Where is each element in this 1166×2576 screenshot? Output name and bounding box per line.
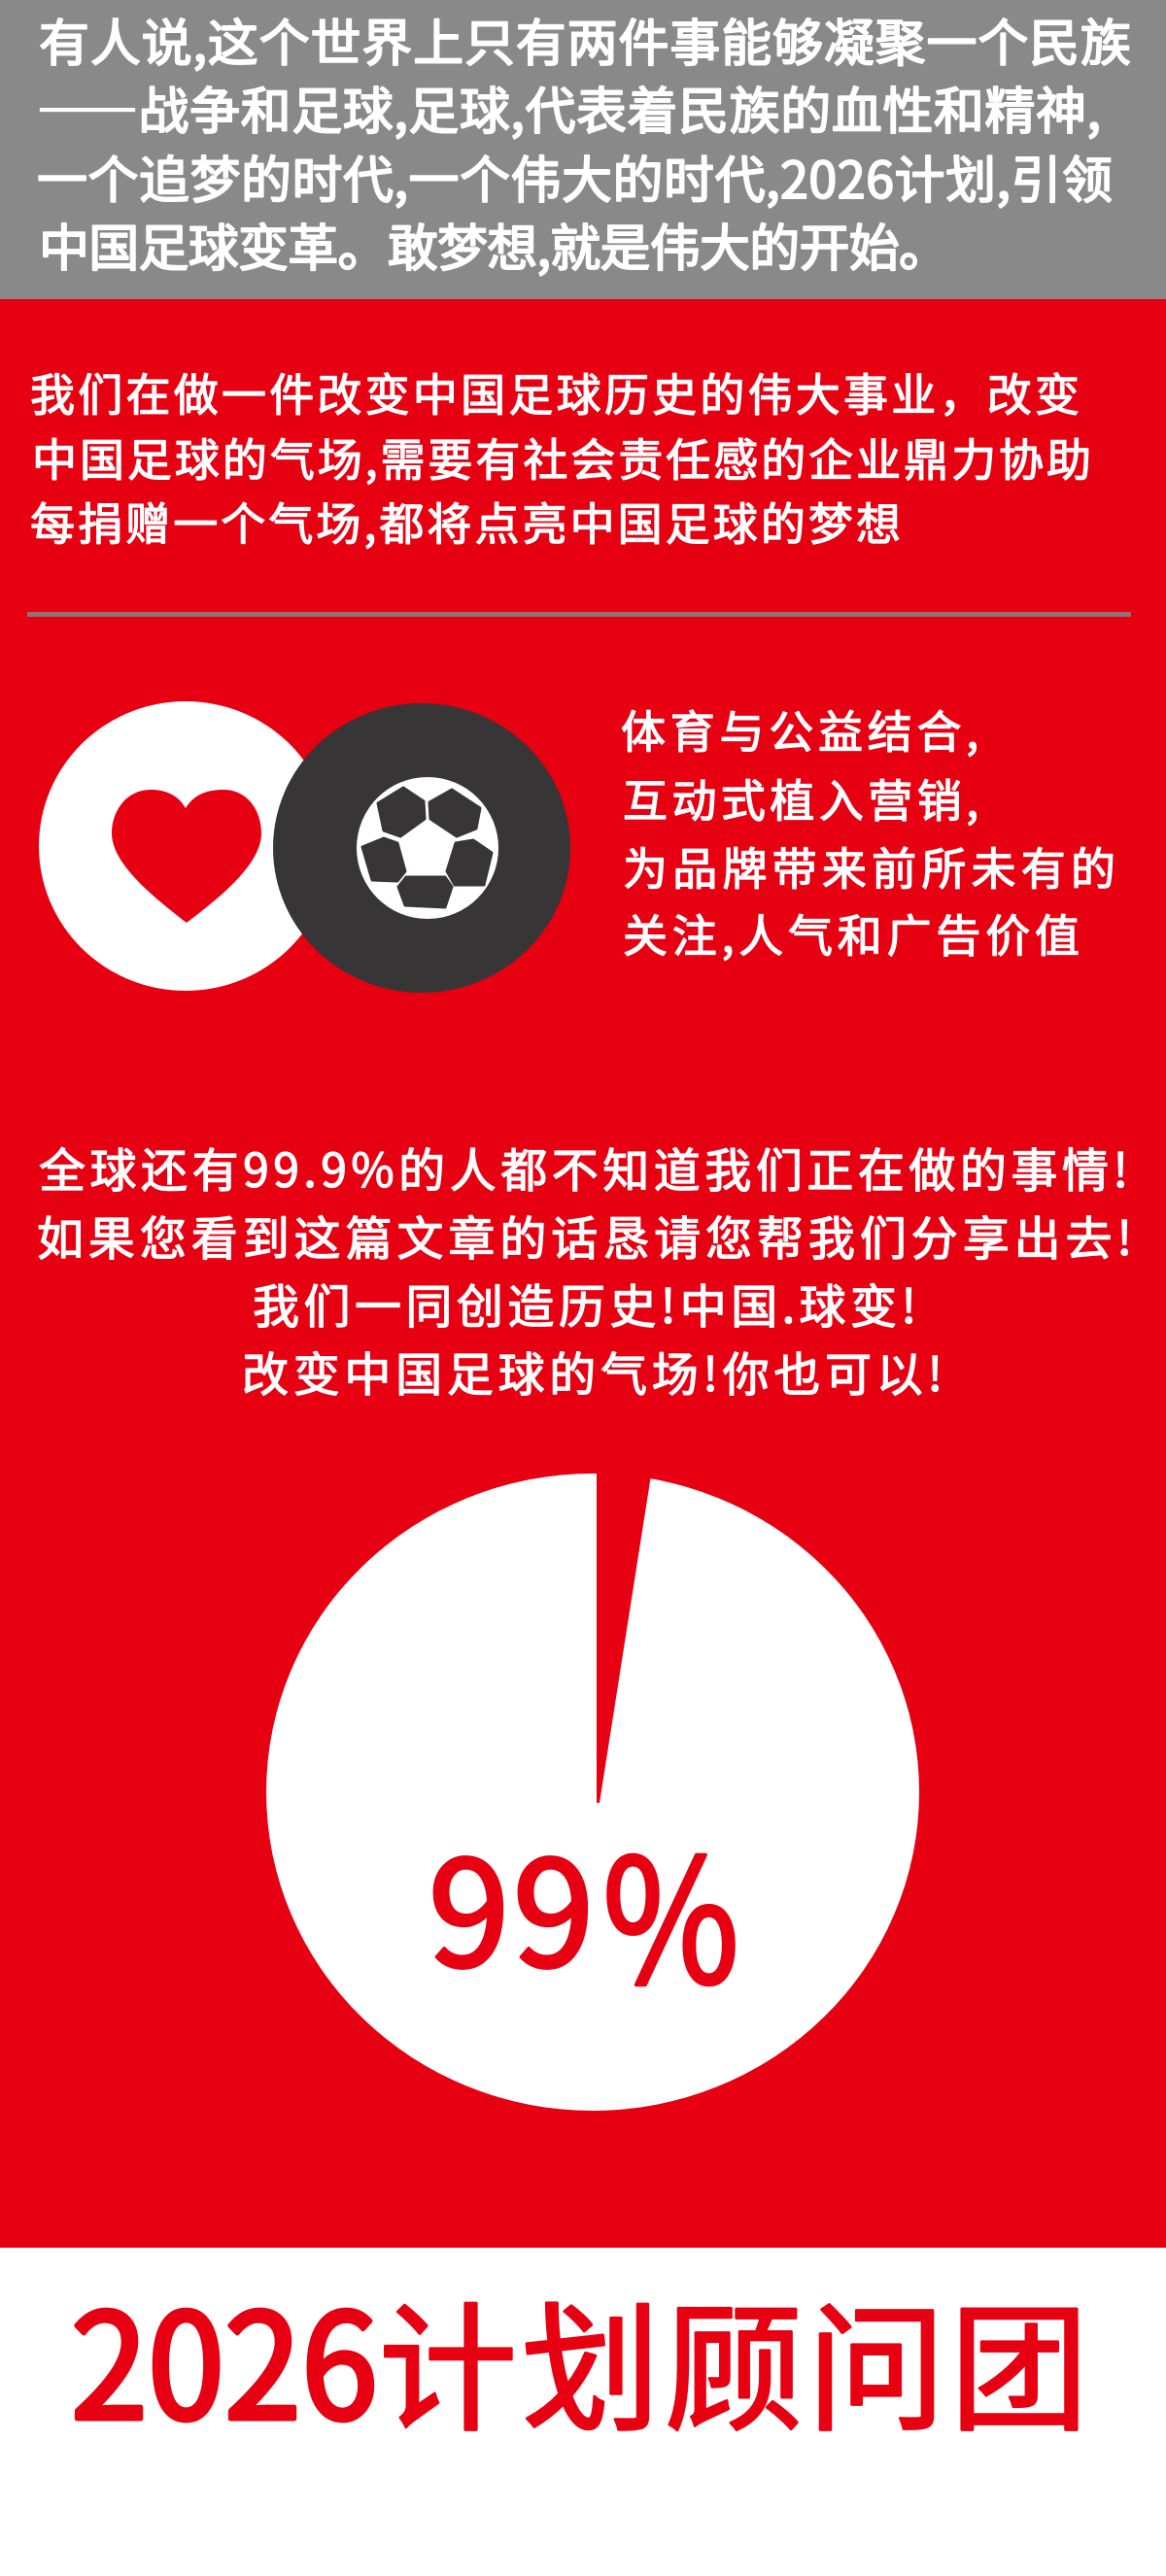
text block: intro: 一个追梦的时代,一个伟大的时代,2026计划,引领 (37, 140, 1113, 213)
heading: advisory group: 计划顾问团 (379, 2258, 1088, 2458)
icon: heart in white circle (39, 701, 332, 991)
panel: red main background (0, 299, 1166, 2248)
text block: call to share: 我们一同创造历史!中国.球变! (253, 1269, 916, 1337)
text block: sports and charity (621, 697, 1115, 966)
text block: call to share: 全球还有99.9%的人都不知道我们正在做的事情! (39, 1133, 1128, 1201)
text block: sports and charity: 关注,人气和广告价值 (623, 901, 1080, 966)
icon: soccer ball in dark circle (273, 703, 570, 993)
text block: sports and charity: 互动式植入营销, (623, 766, 978, 830)
pie value label: 99 (429, 1798, 594, 2009)
text block: call to share: 改变中国足球的气场!你也可以! (242, 1337, 943, 1405)
text block: intro: 有人说,这个世界上只有两件事能够凝聚一个民族 (39, 3, 1131, 76)
text block: call to share (37, 1133, 1132, 1405)
text block: mission statement (30, 360, 1091, 554)
heading: advisory group: 2026 (71, 2251, 378, 2461)
pie value label (429, 1784, 739, 2032)
text block: call to share: 如果您看到这篇文章的话恳请您帮我们分享出去! (37, 1201, 1132, 1269)
text block: intro: ——战争和足球,足球,代表着民族的血性和精神, (37, 71, 1101, 144)
text block: mission statement: 中国足球的气场,需要有社会责任感的企业鼎力协助 (32, 425, 1091, 490)
text block: mission statement: 我们在做一件改变中国足球历史的伟大事业，改变 (30, 360, 1080, 424)
text block: intro: 中国足球变革。敢梦想,就是伟大的开始。 (39, 208, 949, 281)
heading: advisory group (71, 2251, 1088, 2461)
panel: grey intro band (0, 0, 1166, 299)
text block: mission statement: 每捐赠一个气场,都将点亮中国足球的梦想 (30, 490, 901, 554)
text block: intro (37, 3, 1131, 281)
chart: 99 percent pie (266, 1467, 919, 2111)
text block: sports and charity: 为品牌带来前所未有的 (623, 834, 1115, 898)
text block: sports and charity: 体育与公益结合, (621, 697, 978, 762)
pie value label: % (602, 1784, 739, 2032)
